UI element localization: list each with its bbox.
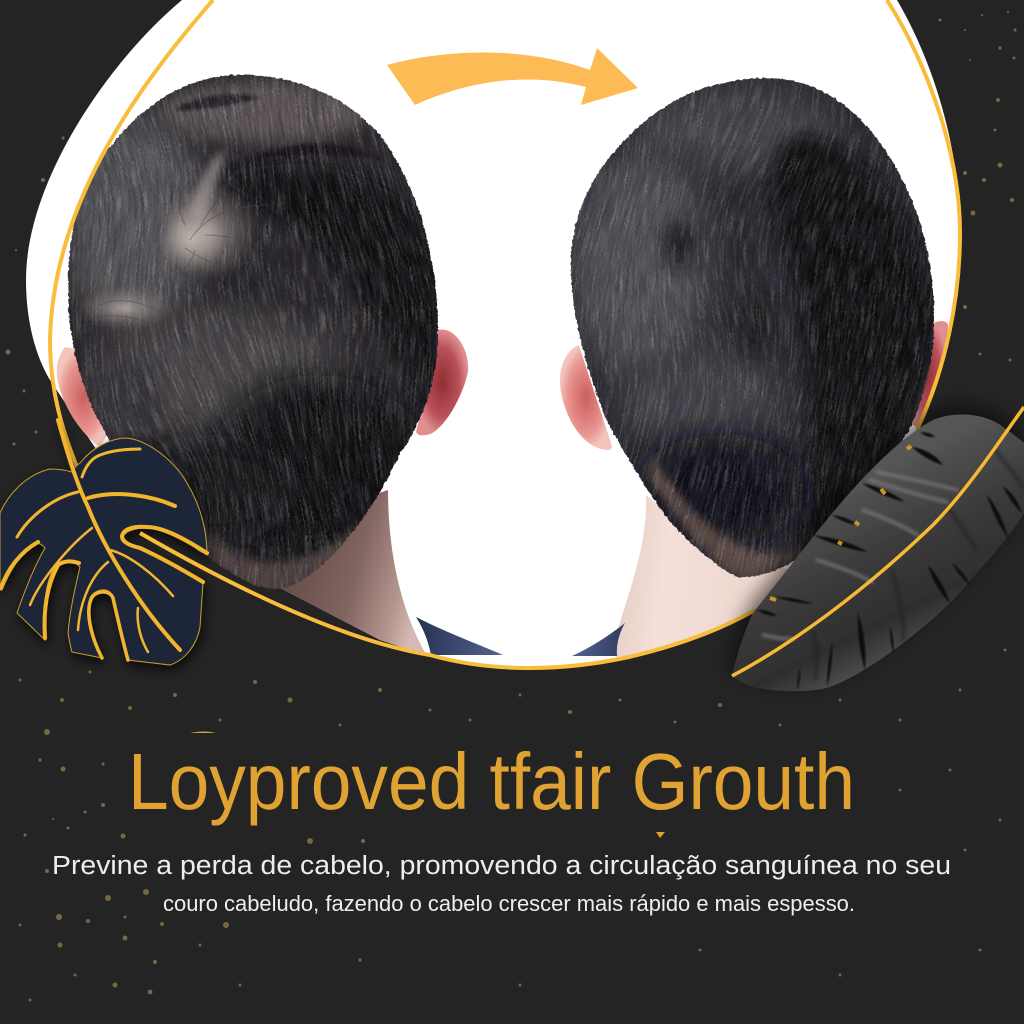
photo: head before treatment (56, 74, 503, 655)
white blob behind the heads (26, 0, 960, 668)
line two: couro cabeludo, fazendo o cabelo crescer mais rápido e mais espesso. (163, 891, 855, 916)
leaf veins (813, 450, 1024, 680)
left ear (560, 345, 612, 450)
neck (615, 495, 790, 657)
gold ring line, bottom (140, 533, 755, 668)
description text (52, 852, 951, 916)
leaf slots (757, 432, 1022, 690)
neck (255, 490, 427, 656)
monstera leaf (0, 420, 207, 665)
banana leaf (732, 415, 1024, 691)
hair (570, 77, 935, 578)
gold midrib over leaf (732, 407, 1024, 676)
collar (416, 617, 503, 655)
right ear (416, 330, 468, 435)
collar (572, 623, 625, 656)
leaf highlights (763, 472, 957, 639)
line one: Previne a perda de cabelo, promovendo a circulação sanguínea no seu (52, 852, 951, 880)
photo: head after treatment (560, 77, 948, 657)
decorative specks near title (190, 732, 665, 838)
arrow (387, 48, 638, 105)
right ear (905, 321, 948, 427)
leaf veins (1, 420, 207, 660)
title: Loyproved tfair Grouth (128, 737, 855, 826)
gold glimpses through slots (770, 446, 911, 600)
left ear (57, 347, 110, 447)
gold ring line (50, 0, 960, 467)
thinning spots (77, 148, 270, 330)
hair (67, 74, 438, 590)
